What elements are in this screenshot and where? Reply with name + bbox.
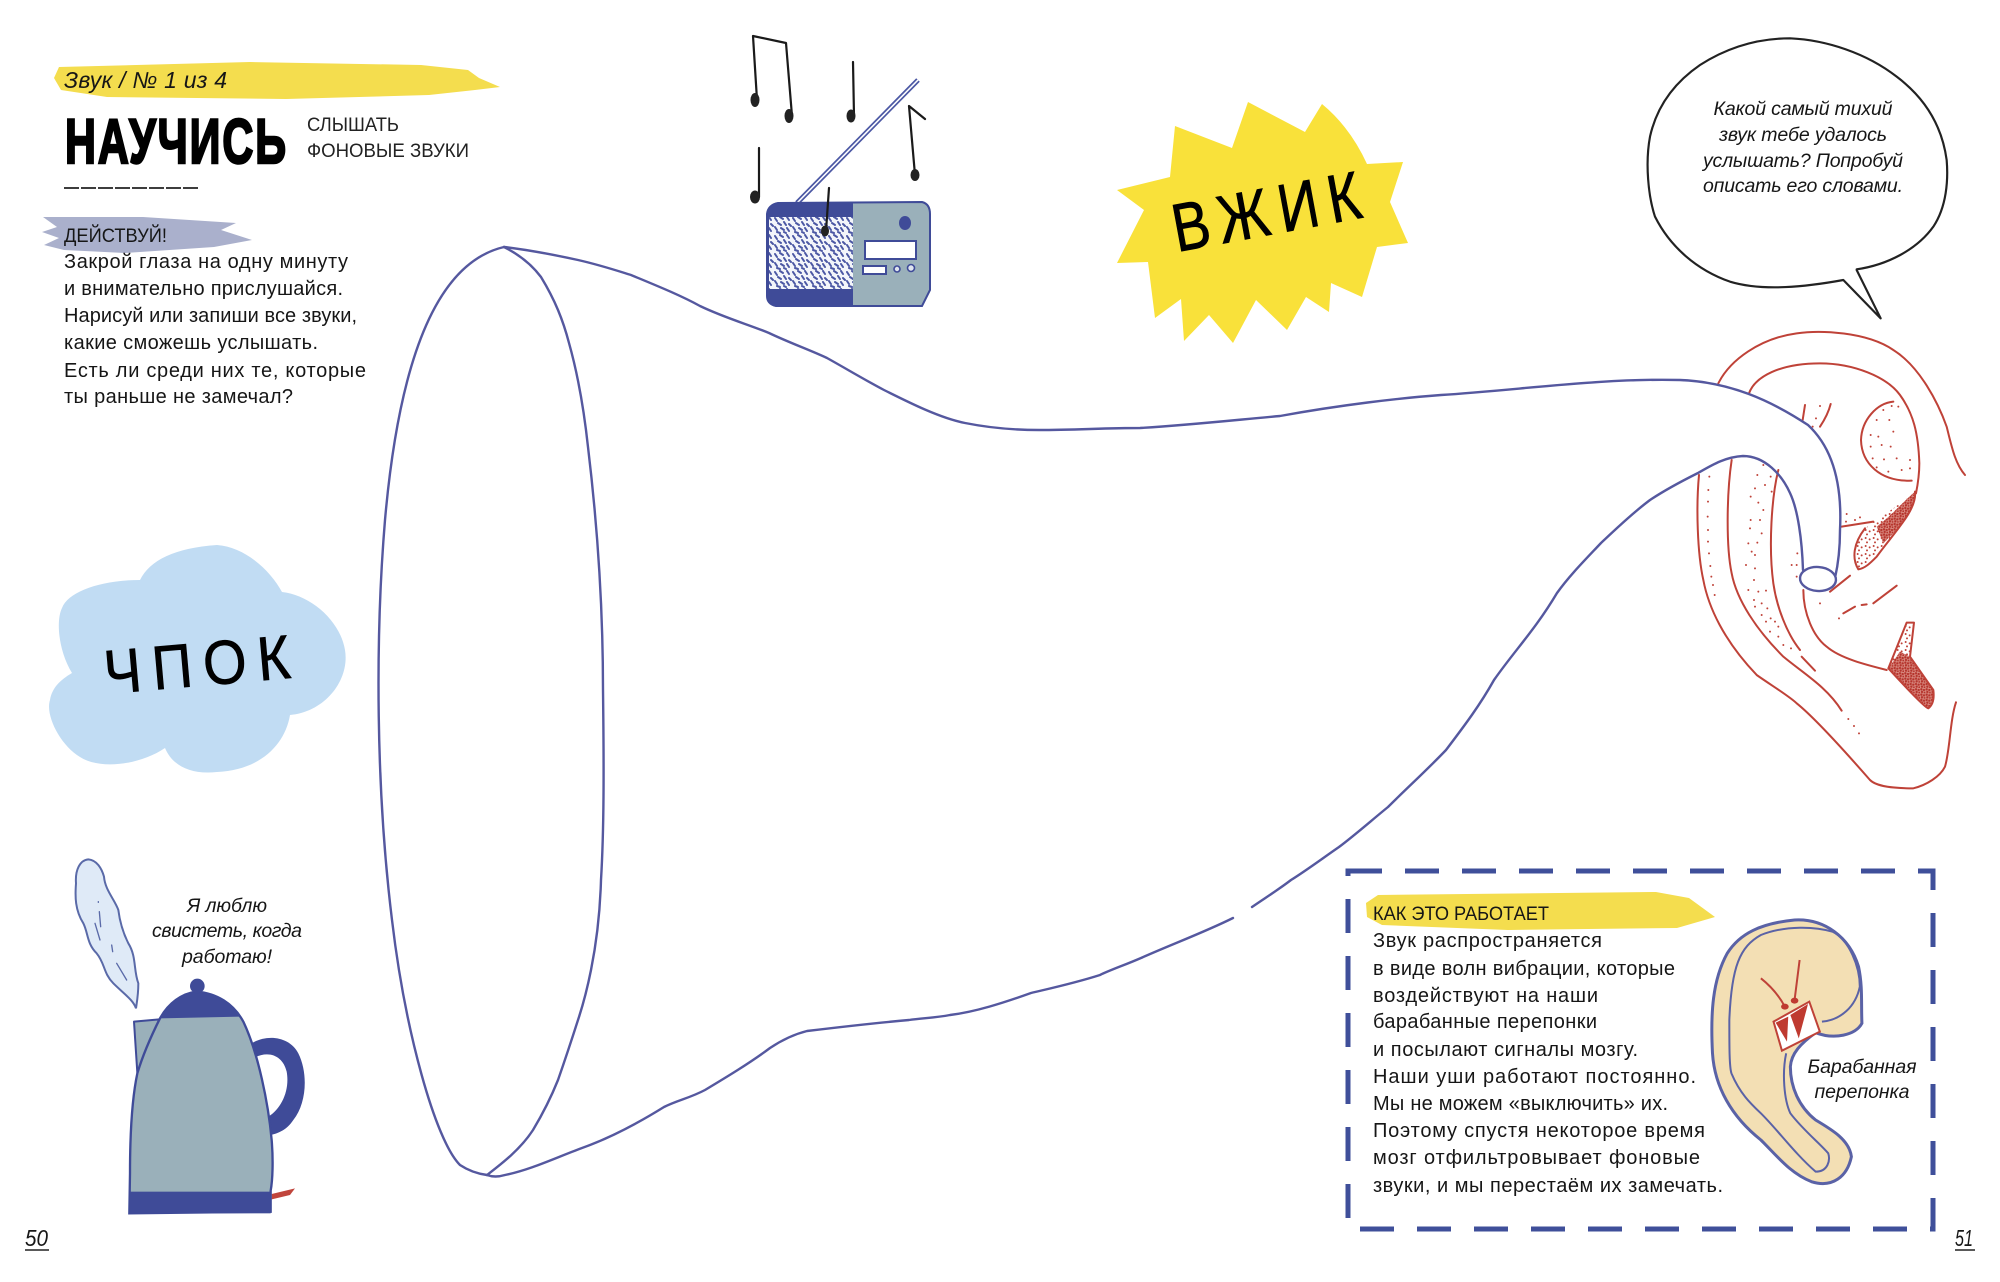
task block: ДЕЙСТВУЙ! [64, 225, 167, 247]
cloud: ЧПОК: ЧПОК [101, 623, 293, 708]
kettle speech: работаю! [181, 946, 273, 968]
speech bubble [1648, 38, 1947, 318]
kettle illustration [76, 859, 305, 1213]
heading: how it works: КАК ЭТО РАБОТАЕТ [1373, 904, 1549, 925]
page number 50: 50 [25, 1225, 48, 1251]
title: ФОНОВЫЕ ЗВУКИ [307, 141, 469, 162]
explanation text: Звук распространяется [1373, 930, 1602, 952]
kettle switch [272, 1188, 295, 1199]
eardrum caption: перепонка [1814, 1081, 1910, 1103]
burst: ВЖИК: ВЖИК [1166, 158, 1367, 267]
kettle body [129, 992, 273, 1213]
explanation text: мозг отфильтровывает фоновые [1373, 1147, 1700, 1169]
ear diagram with drum [1712, 920, 1862, 1184]
task block: какие сможешь услышать. [64, 332, 318, 354]
explanation text [1373, 930, 1723, 1197]
explanation text: Мы не можем «выключить» их. [1373, 1093, 1668, 1115]
task block: и внимательно прислушайся. [64, 278, 343, 300]
explanation text: и посылают сигналы мозгу. [1373, 1039, 1638, 1061]
task block: Нарисуй или запиши все звуки, [64, 305, 357, 327]
task block: Есть ли среди них те, которые [64, 360, 366, 382]
task block [42, 217, 366, 408]
task block: ты раньше не замечал? [64, 386, 293, 408]
eardrum caption [1808, 1056, 1917, 1103]
speech bubble: услышать? Попробуй [1701, 150, 1903, 172]
explanation text: звуки, и мы перестаём их замечать. [1373, 1175, 1723, 1197]
radio antenna [797, 80, 918, 203]
speech bubble: Какой самый тихий [1714, 98, 1893, 120]
radio body [767, 202, 930, 306]
kettle spout [134, 1019, 159, 1073]
explanation text: воздействуют на наши [1373, 985, 1598, 1007]
cloud: ЧПОК [49, 545, 346, 773]
title: НАУЧИСЬ [65, 107, 286, 177]
speech bubble: описать его словами. [1703, 175, 1903, 197]
ear trumpet horn [379, 247, 1840, 1176]
kettle lid [160, 979, 241, 1018]
explanation text: в виде волн вибрации, которые [1373, 958, 1675, 980]
kettle handle [251, 1038, 305, 1135]
explanation text: барабанные перепонки [1373, 1011, 1597, 1033]
brush label: sound number [54, 62, 500, 99]
kettle speech: свистеть, когда [152, 920, 302, 942]
speech bubble: звук тебе удалось [1718, 124, 1887, 146]
eardrum caption: Барабанная [1808, 1056, 1917, 1078]
brush label: sound number: Звук / № 1 из 4 [64, 67, 227, 93]
explanation text: Наши уши работают постоянно. [1373, 1066, 1696, 1088]
explanation text: Поэтому спустя некоторое время [1373, 1120, 1705, 1142]
burst: ВЖИК [1117, 102, 1408, 343]
page number 51: 51 [1955, 1225, 1973, 1251]
panel: how it works [1348, 871, 1933, 1229]
steam [76, 859, 138, 1008]
radio with music notes [750, 36, 930, 306]
heading: how it works [1366, 892, 1715, 930]
kettle base [129, 1192, 271, 1213]
title: СЛЫШАТЬ [307, 115, 399, 136]
kettle speech: Я люблю [186, 895, 267, 917]
title [65, 107, 469, 177]
kettle speech [152, 895, 302, 968]
task block: Закрой глаза на одну минуту [64, 251, 348, 273]
music notes [750, 36, 925, 236]
ear drawing [1697, 332, 1965, 788]
